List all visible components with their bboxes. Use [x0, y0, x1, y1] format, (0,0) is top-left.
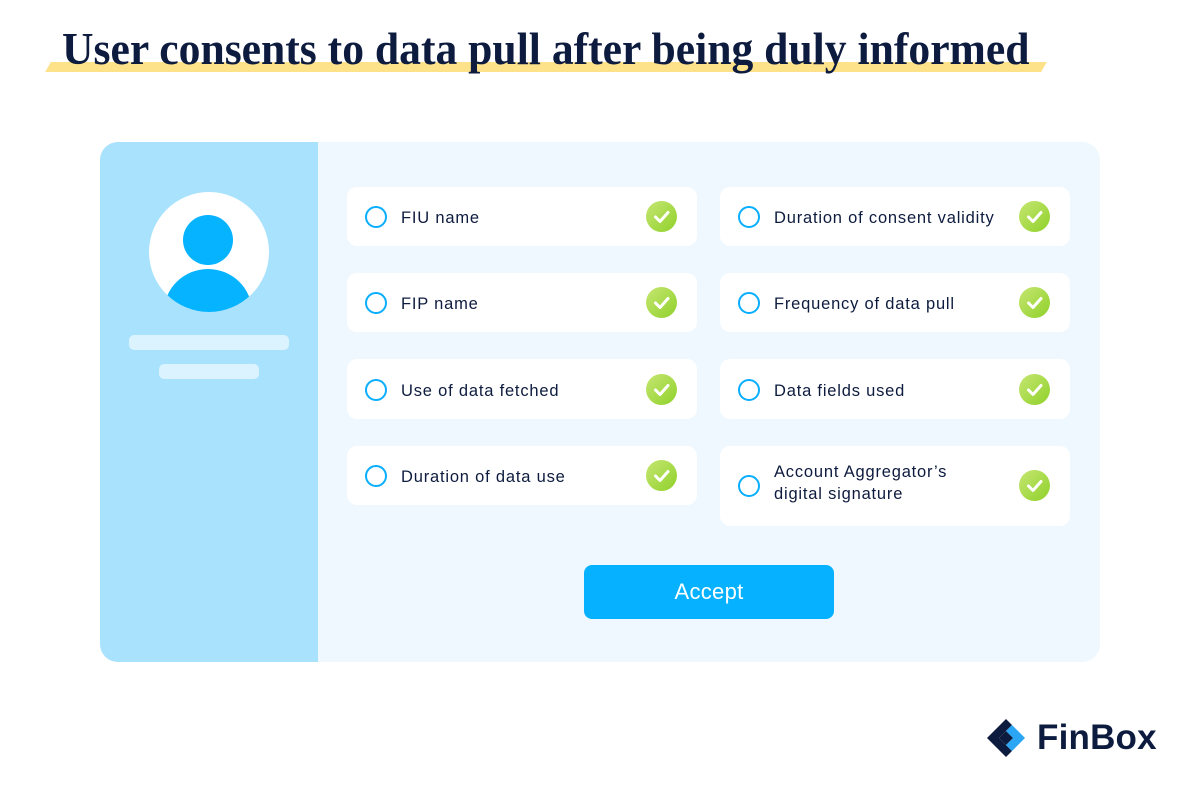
card: Duration of consent validity: Duration of consent validity	[774, 209, 995, 227]
title: User consents to data pull after being duly informed	[62, 23, 1029, 74]
card: Account Aggregator's digital signature: Account Aggregator’s	[774, 463, 947, 481]
card: FIP name: FIP name	[401, 295, 479, 313]
sidebar: user profile	[100, 142, 318, 662]
card: Duration of data use	[347, 446, 697, 505]
card: Account Aggregator's digital signature: digital signature	[774, 485, 903, 503]
card: Data fields used	[720, 359, 1070, 419]
name placeholder bars	[129, 335, 289, 350]
title highlight	[45, 62, 1047, 72]
accept button	[584, 565, 834, 619]
logo: FinBox: FinBox	[1037, 718, 1157, 757]
card: FIP name	[347, 273, 697, 332]
card: Duration of data use: Duration of data use	[401, 468, 566, 486]
panel: consent screen	[100, 142, 1100, 662]
icon: FinBox mark	[987, 719, 1025, 757]
icon: user avatar	[149, 192, 269, 312]
card: Frequency of data pull	[720, 273, 1070, 332]
card: FIU name: FIU name	[401, 209, 480, 227]
card: Frequency of data pull: Frequency of data pull	[774, 295, 955, 313]
card: Duration of consent validity	[720, 187, 1070, 246]
accept button: Accept	[674, 579, 744, 604]
card: Data fields used: Data fields used	[774, 382, 905, 400]
card: FIU name	[347, 187, 697, 246]
card: Use of data fetched: Use of data fetched	[401, 382, 559, 400]
card: Use of data fetched	[347, 359, 697, 419]
card: Account Aggregator's digital signature	[720, 446, 1070, 526]
